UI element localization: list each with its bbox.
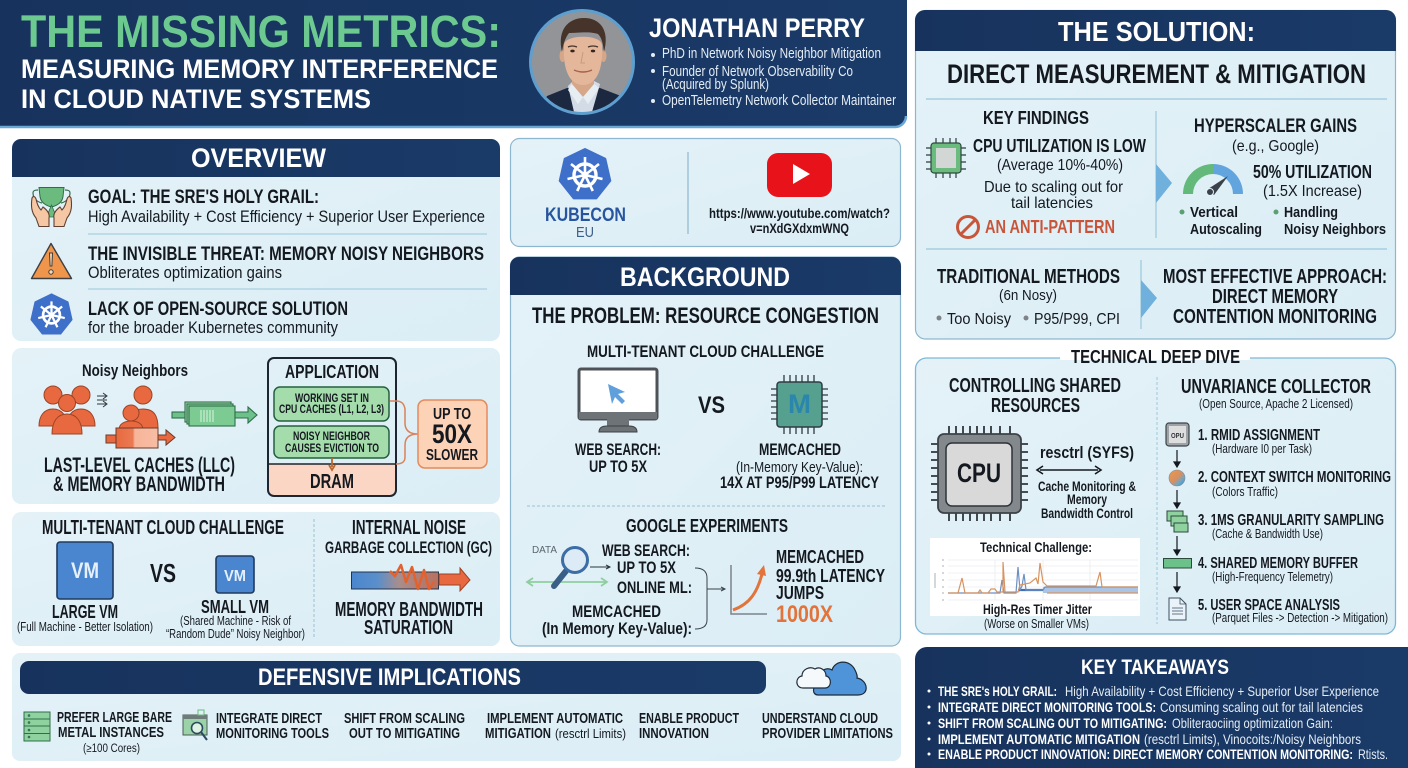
callout: 50x slower: SLOWER: [426, 447, 478, 464]
video url: v=nXdGXdxmWNQ: [750, 221, 849, 236]
icon: group of neighbors: [39, 386, 95, 434]
latency callout: 1000X: [776, 601, 833, 628]
step 2 text: [1198, 469, 1391, 499]
item: automatic mitigation: [485, 711, 626, 742]
utilization stat: (1.5X Increase): [1263, 183, 1362, 200]
speaker bio bullets: PhD in Network Noisy Neighbor Mitigation: [662, 46, 881, 62]
bracket arrow: [695, 568, 725, 629]
step 5 text: 5. USER SPACE ANALYSIS: [1198, 597, 1340, 614]
anti-pattern warning: AN ANTI-PATTERN: [985, 217, 1115, 237]
application diagram: DRAM: [310, 471, 354, 493]
vs label: VS: [150, 558, 176, 588]
application diagram: [268, 358, 396, 496]
small vm: [166, 556, 305, 641]
double arrow: [1037, 466, 1101, 474]
working set box: [274, 387, 389, 421]
noisy neighbors label: Noisy Neighbors: [82, 361, 188, 380]
technical challenge chart: High-Res Timer Jitter: [983, 601, 1092, 617]
speaker bio bullets: (Acquired by Splunk): [662, 77, 769, 93]
item: cloud limitations: [762, 711, 893, 742]
technical challenge chart: [930, 538, 1140, 617]
takeaway 2: [928, 699, 1363, 715]
icon: memory chip: M: [788, 389, 811, 419]
step 1 icon: OPU: [1171, 433, 1184, 440]
item: automatic mitigation: MITIGATION: [485, 726, 551, 742]
llc caption: LAST-LEVEL CACHES (LLC): [44, 454, 235, 477]
collector heading: (Open Source, Apache 2 Licensed): [1199, 397, 1353, 411]
utilization stat: 50% UTILIZATION: [1253, 162, 1372, 182]
saturation caption: SATURATION: [364, 617, 453, 639]
latency callout: [776, 547, 885, 628]
cpu utilization finding: tail latencies: [1011, 195, 1093, 212]
speaker name: JONATHAN PERRY: [649, 13, 865, 43]
cpu utilization finding: CPU UTILIZATION IS LOW: [973, 136, 1146, 156]
saturation caption: MEMORY BANDWIDTH: [335, 599, 483, 621]
panel: defensive implications: [12, 653, 901, 761]
title: [21, 6, 501, 114]
icon: small arrows: [97, 393, 107, 407]
takeaway 4: [928, 731, 1361, 747]
icon: memory chip: [771, 375, 828, 434]
icon: clouds: [797, 662, 866, 695]
title: THE MISSING METRICS:: [21, 6, 501, 57]
takeaway 4: (resctrl Limits), Vinocoits:/Noisy Neighbors: [1144, 731, 1361, 747]
icon: cpu: [931, 426, 1028, 521]
step 1 icon: [1166, 423, 1189, 446]
experiment list: UP TO 5X: [617, 558, 676, 577]
anti-pattern warning: [958, 216, 1115, 238]
item: bare metal: [57, 710, 172, 755]
kubecon label: EU: [576, 224, 594, 241]
traditional methods: P95/P99, CPI: [1034, 311, 1120, 328]
item: product innovation: INNOVATION: [639, 726, 709, 742]
large vm: VM: [71, 558, 99, 583]
large vm: [17, 542, 153, 634]
panel: background: [510, 257, 901, 646]
kubecon label: [545, 205, 626, 241]
item: monitoring tools: [216, 711, 329, 742]
utilization stat: [1253, 162, 1372, 200]
internal noise heading: [325, 517, 492, 557]
icon: kubecon logo: [560, 149, 610, 198]
speaker bio bullets: Founder of Network Observability Co: [662, 64, 853, 80]
step 4 text: [1198, 555, 1358, 584]
icon: data magnifier: [527, 545, 610, 586]
title: MEASURING MEMORY INTERFERENCE: [21, 54, 498, 84]
icon: neighbor with packet: [106, 386, 175, 448]
kubecon label: KUBECON: [545, 205, 626, 226]
arrow: step 2 to 3: [1174, 490, 1180, 508]
small vm: VM: [224, 568, 246, 585]
goal text: [88, 187, 485, 226]
icon: monitor: [579, 369, 657, 432]
speaker bio bullets: OpenTelemetry Network Collector Maintainer: [662, 93, 896, 109]
eviction box: [274, 426, 389, 458]
item: product innovation: [639, 711, 739, 742]
takeaway 3: Obliteraociing optimization Gain:: [1172, 715, 1333, 731]
panel: overview: [12, 139, 500, 341]
item: monitoring tools: INTEGRATE DIRECT: [216, 711, 322, 727]
cpu utilization finding: Due to scaling out for: [984, 179, 1124, 196]
arrow: traditional to effective: [1141, 280, 1157, 318]
gc saturation arrow: [352, 565, 470, 591]
latency chart: [731, 565, 767, 614]
controlling resources heading: RESOURCES: [991, 395, 1080, 417]
experiment list: MEMCACHED: [572, 602, 661, 621]
application diagram: APPLICATION: [285, 362, 379, 382]
title: IN CLOUD NATIVE SYSTEMS: [21, 84, 371, 114]
working set box: WORKING SET IN: [295, 391, 369, 405]
step 1 text: (Hardware I0 per Task): [1212, 441, 1312, 456]
resctrl description: Bandwidth Control: [1041, 506, 1133, 521]
item: shift to mitigating: OUT TO MITIGATING: [349, 726, 460, 742]
resctrl label: resctrl (SYFS): [1040, 443, 1134, 462]
cpu utilization finding: [973, 136, 1146, 212]
eviction box: NOISY NEIGHBOR: [293, 429, 370, 443]
experiment list: (In Memory Key-Value):: [542, 619, 692, 638]
hyperscaler heading: [1194, 116, 1357, 155]
item: bare metal: METAL INSTANCES: [58, 725, 164, 741]
internal noise heading: INTERNAL NOISE: [352, 517, 466, 539]
deep dive heading: TECHNICAL DEEP DIVE: [1071, 347, 1240, 367]
multi-tenant heading: MULTI-TENANT CLOUD CHALLENGE: [42, 517, 284, 539]
vs label: VS: [698, 392, 725, 419]
gauge: [1183, 164, 1243, 196]
arrow: step 4 to 5: [1174, 572, 1180, 592]
web search result: [575, 441, 661, 476]
defensive heading bar: [20, 661, 766, 694]
most effective approach: DIRECT MEMORY: [1212, 286, 1338, 308]
item: bare metal: (≥100 Cores): [83, 743, 140, 755]
overview heading: OVERVIEW: [191, 143, 326, 173]
item: monitoring tools: MONITORING TOOLS: [216, 726, 329, 742]
technical challenge chart: Technical Challenge:: [980, 539, 1092, 555]
memcached result: MEMCACHED: [759, 441, 841, 459]
speaker bio bullets: [651, 46, 896, 109]
latency callout: JUMPS: [776, 583, 824, 603]
threat text: THE INVISIBLE THREAT: MEMORY NOISY NEIGHBORS: [88, 244, 484, 265]
item: automatic mitigation: IMPLEMENT AUTOMATIC: [487, 711, 623, 727]
step 5 icon: [1169, 598, 1186, 620]
bracket connector: [390, 401, 418, 464]
callout: 50x slower: UP TO: [433, 406, 471, 423]
takeaway 1: THE SRE's HOLY GRAIL:: [938, 683, 1057, 699]
step 2 icon: [1169, 470, 1185, 486]
header banner: [0, 0, 907, 128]
traditional methods: Too Noisy: [947, 311, 1011, 328]
experiment list: [542, 541, 692, 638]
controlling resources heading: CONTROLLING SHARED: [949, 375, 1121, 397]
cpu utilization finding: (Average 10%-40%): [997, 157, 1123, 174]
step 1 text: 1. RMID ASSIGNMENT: [1198, 427, 1320, 444]
problem heading: THE PROBLEM: RESOURCE CONGESTION: [532, 303, 879, 328]
experiment list: WEB SEARCH:: [602, 541, 690, 560]
takeaway 2: INTEGRATE DIRECT MONITORING TOOLS:: [938, 699, 1156, 715]
callout: 50x slower: 50X: [432, 419, 472, 449]
item: shift to mitigating: SHIFT FROM SCALING: [344, 711, 465, 727]
icon: kubernetes wheel: [31, 294, 72, 334]
challenge subheading: MULTI-TENANT CLOUD CHALLENGE: [587, 342, 824, 361]
internal noise heading: GARBAGE COLLECTION (GC): [325, 538, 492, 557]
takeaway 5: Rtists.: [1358, 746, 1388, 762]
collector heading: [1181, 376, 1371, 411]
video url: [709, 206, 890, 236]
web search result: UP TO 5X: [589, 458, 647, 476]
goal text: GOAL: THE SRE'S HOLY GRAIL:: [88, 187, 319, 208]
icon: server rack: [24, 712, 50, 741]
threat text: Obliterates optimization gains: [88, 263, 282, 282]
takeaways heading: KEY TAKEAWAYS: [1081, 656, 1229, 679]
llc caption: & MEMORY BANDWIDTH: [53, 473, 225, 496]
video url: https://www.youtube.com/watch?: [709, 206, 890, 221]
panel: the solution: [915, 10, 1396, 339]
small vm: (Shared Machine - Risk of: [180, 614, 291, 628]
step 2 text: (Colors Traffic): [1212, 484, 1278, 499]
goal text: High Availability + Cost Efficiency + Superior User Experience: [88, 207, 485, 226]
item: bare metal: PREFER LARGE BARE: [57, 710, 172, 726]
traditional methods: (6n Nosy): [999, 287, 1057, 304]
solution heading: THE SOLUTION:: [1058, 16, 1255, 47]
large vm: (Full Machine - Better Isolation): [17, 620, 153, 634]
threat text: [88, 244, 484, 282]
icon: trophy and hands: [31, 188, 72, 226]
gains bullets: Noisy Neighbors: [1284, 221, 1386, 238]
takeaway 2: Consuming scaling out for tail latencies: [1160, 699, 1363, 715]
resctrl description: Memory: [1067, 492, 1107, 507]
traditional methods: TRADITIONAL METHODS: [937, 266, 1120, 288]
icon: cpu: CPU: [957, 458, 1001, 488]
hyperscaler heading: (e.g., Google): [1232, 138, 1319, 155]
open source text: LACK OF OPEN-SOURCE SOLUTION: [88, 299, 348, 320]
icon: monitoring magnifier: [183, 710, 207, 740]
latency callout: 99.9th LATENCY: [776, 566, 885, 586]
panel: multi-tenant vm comparison: [12, 512, 500, 646]
gains bullets: Handling: [1284, 204, 1338, 221]
step 3 text: (Cache & Bandwidth Use): [1212, 526, 1323, 541]
gains bullets: Autoscaling: [1190, 221, 1262, 238]
icon: green data packets: [172, 402, 257, 426]
item: product innovation: ENABLE PRODUCT: [639, 711, 739, 727]
callout: 50x slower: [418, 400, 487, 468]
panel: technical deep dive: [916, 345, 1396, 634]
step 1 text: [1198, 427, 1320, 456]
saturation caption: [335, 599, 483, 639]
panel: key takeaways: [915, 647, 1408, 768]
gains bullets: Vertical: [1190, 204, 1238, 221]
icon: youtube: [767, 153, 832, 197]
open source text: for the broader Kubernetes community: [88, 318, 338, 337]
step 5 text: [1198, 597, 1388, 625]
speaker photo: [530, 10, 634, 116]
gains bullets: [1180, 204, 1386, 238]
eviction arrow: [329, 458, 335, 470]
memcached result: [720, 441, 879, 492]
background heading: BACKGROUND: [620, 262, 790, 292]
resctrl description: Cache Monitoring &: [1038, 479, 1136, 494]
step 3 icon: [1167, 511, 1188, 532]
most effective approach: [1163, 266, 1387, 328]
arrow: findings to gains: [1156, 164, 1172, 203]
experiment list: ONLINE ML:: [617, 578, 692, 597]
google experiments heading: GOOGLE EXPERIMENTS: [626, 516, 788, 536]
item: cloud limitations: UNDERSTAND CLOUD: [762, 711, 878, 727]
step 4 icon: [1164, 558, 1192, 568]
panel: kubecon and video link: [510, 138, 900, 246]
small vm: SMALL VM: [201, 597, 269, 617]
icon: warning triangle: [32, 244, 72, 278]
defensive heading bar: DEFENSIVE IMPLICATIONS: [258, 664, 521, 691]
icon: data magnifier: DATA: [532, 545, 557, 556]
step 4 text: (High-Frequency Telemetry): [1212, 569, 1333, 584]
takeaway 3: SHIFT FROM SCALING OUT TO MITIGATING:: [938, 715, 1167, 731]
resctrl description: [1038, 479, 1136, 521]
traditional methods: [936, 266, 1120, 328]
eviction box: CAUSES EVICTION TO: [285, 441, 379, 455]
item: automatic mitigation: (resctrl Limits): [555, 726, 626, 741]
open source text: [88, 299, 348, 337]
working set box: CPU CACHES (L1, L2, L3): [279, 402, 384, 416]
item: cloud limitations: PROVIDER LIMITATIONS: [762, 726, 893, 742]
item: shift to mitigating: [344, 711, 465, 742]
takeaway 4: IMPLEMENT AUTOMATIC MITIGATION: [938, 731, 1140, 747]
large vm: LARGE VM: [52, 602, 118, 622]
arrow: step 3 to 4: [1174, 536, 1180, 555]
llc caption: [44, 454, 235, 496]
memcached result: 14X AT P95/P99 LATENCY: [720, 474, 879, 492]
icon: cpu chip: [926, 138, 966, 178]
web search result: WEB SEARCH:: [575, 441, 661, 459]
small vm: “Random Dude” Noisy Neighbor): [166, 627, 305, 641]
step 3 text: [1198, 512, 1384, 541]
memcached result: (In-Memory Key-Value):: [736, 459, 863, 476]
takeaway 1: [928, 683, 1379, 699]
key findings heading: KEY FINDINGS: [983, 108, 1089, 128]
panel: noisy neighbors: [12, 348, 500, 504]
chart caption: (Worse on Smaller VMs): [984, 617, 1089, 631]
hyperscaler heading: HYPERSCALER GAINS: [1194, 116, 1357, 137]
latency callout: MEMCACHED: [776, 547, 864, 567]
controlling resources heading: [949, 375, 1121, 417]
arrow: step 1 to 2: [1174, 450, 1180, 467]
